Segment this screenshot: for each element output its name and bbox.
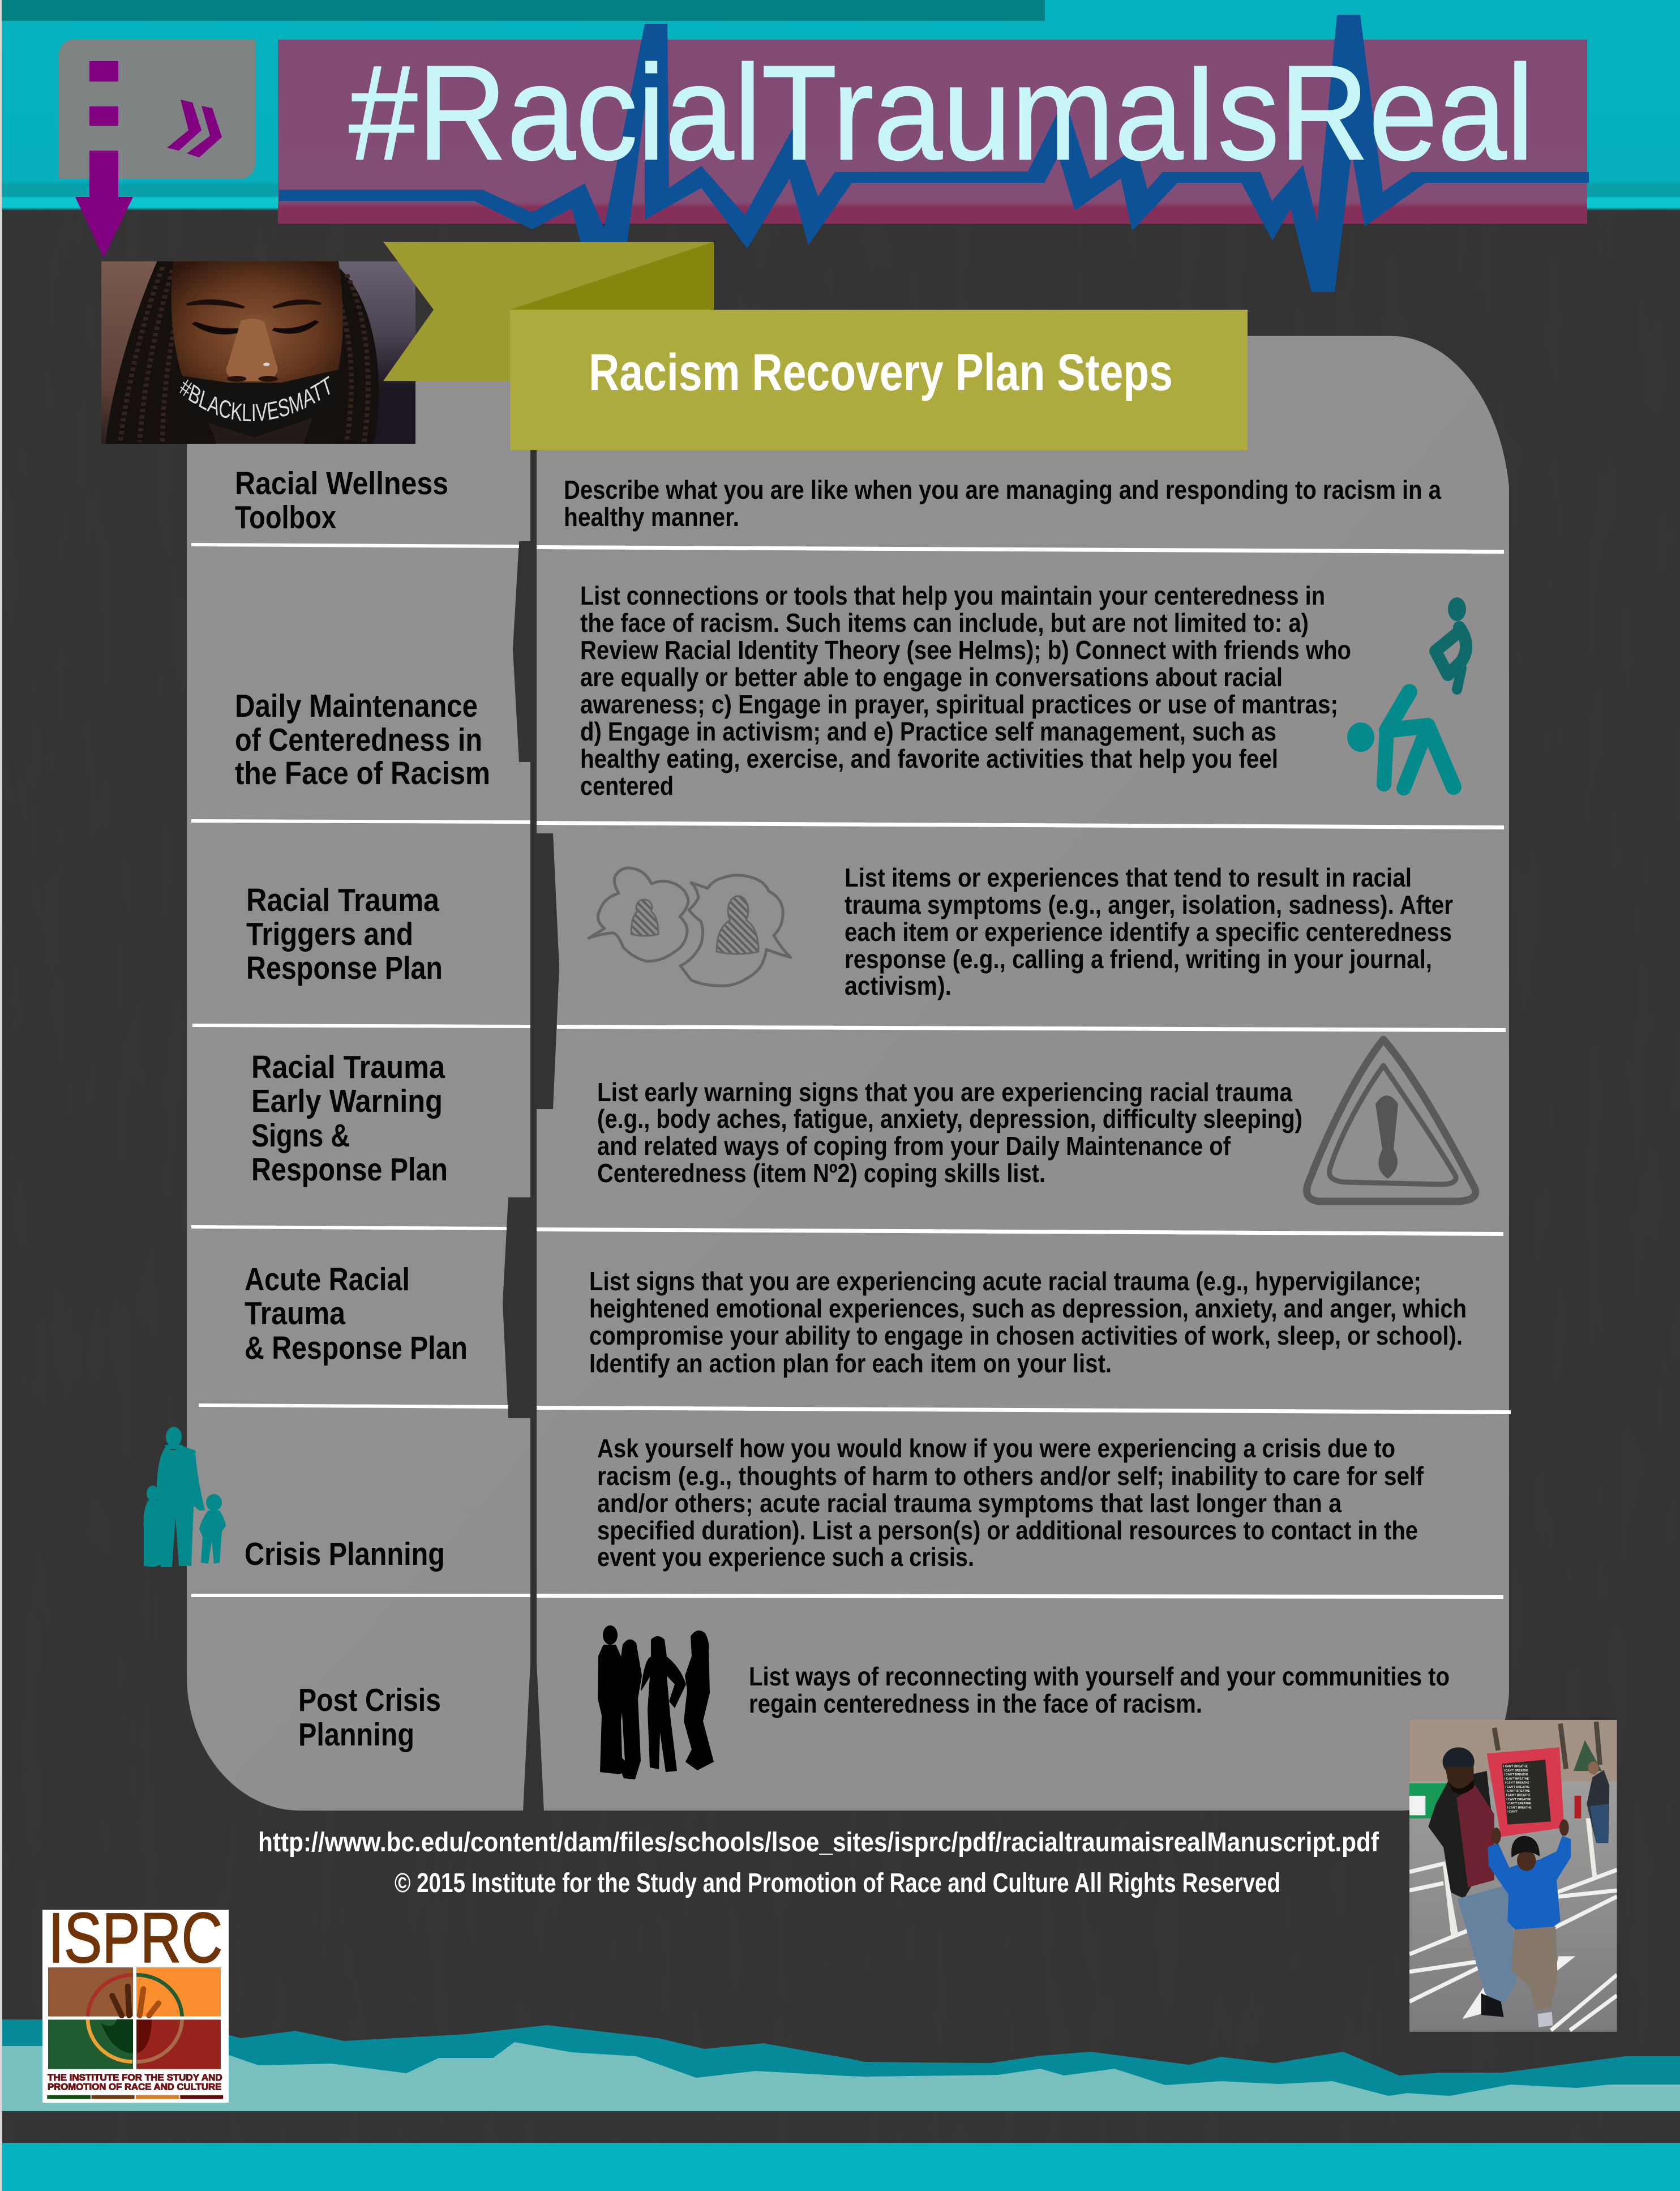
photo: man and boy with sign: I CAN'T BREATHE (1507, 1806, 1532, 1809)
photo: man and boy with sign: I CAN'T BREATHE (1504, 1769, 1528, 1773)
icon: warning triangle (1307, 1039, 1476, 1201)
left column headings: of Centeredness in (235, 722, 482, 758)
text: step 5 description: Identify an action plan for each item on your list. (589, 1349, 1112, 1378)
logo: ISPRC: PROMOTION OF RACE AND CULTURE (48, 2082, 221, 2092)
text: step 5 description: heightened emotional experiences, such as depression, anxiety, and anger, which (589, 1294, 1467, 1323)
arrow: purple down arrow (75, 151, 133, 258)
left column headings: Daily Maintenance (235, 688, 478, 724)
source link: http://www.bc.edu/content/dam/files/schools/lsoe_sites/isprc/pdf/racialtraumaisrealManuscript.pdf (258, 1828, 1379, 1858)
text: step 7 description: regain centeredness in the face of racism. (749, 1689, 1202, 1718)
logo: ISPRC: ISPRC (48, 1899, 222, 1978)
text: step 4 description (597, 1077, 1302, 1188)
text: step 2 description: d) Engage in activism; and e) Practice self management, such as (580, 717, 1276, 746)
tape text: #BLACKLIVESMATT (179, 376, 330, 421)
text: step 2 description: List connections or tools that help you maintain your centeredness in (580, 581, 1325, 610)
photo: woman with taped mouth (101, 262, 417, 444)
section banner: Racism Recovery Plan Steps (589, 344, 1173, 401)
photo: man and boy with sign: I CAN'T (1507, 1810, 1518, 1814)
left column headings: Signs & (251, 1118, 350, 1154)
text: step 2 description (580, 581, 1351, 801)
text: step 5 description (589, 1266, 1467, 1378)
logo: ISPRC (42, 1899, 229, 2103)
text: step 1 description: Describe what you are like when you are managing and responding to racism in a (564, 475, 1441, 504)
centre divider (503, 450, 559, 1815)
photo: man and boy with sign: I CAN'T BREATHE (1503, 1765, 1528, 1769)
photo: man and boy with sign: I CAN'T BREATHE (1507, 1802, 1531, 1805)
left column headings: the Face of Racism (235, 755, 490, 791)
photo: man and boy with sign: I CAN'T BREATHE (1505, 1786, 1530, 1789)
icon: group silhouette (598, 1625, 714, 1779)
left column headings: Racial Trauma (251, 1049, 445, 1085)
text: step 2 description: are equally or better able to engage in conversations about racial (580, 662, 1283, 692)
text: step 2 description: awareness; c) Engage in prayer, spiritual practices or use of mantras; (580, 690, 1338, 719)
left column headings: Crisis Planning (245, 1536, 445, 1572)
left column headings: Post Crisis (298, 1682, 441, 1718)
text: step 2 description: Review Racial Identity Theory (see Helms); b) Connect with friends who (580, 635, 1351, 665)
text: step 1 description: healthy manner. (564, 502, 739, 532)
copyright: © 2015 Institute for the Study and Promotion of Race and Culture All Rights Reserved (395, 1868, 1280, 1898)
left column headings (235, 465, 490, 1753)
icon: exercising figures (1347, 597, 1466, 788)
text: step 4 description: List early warning signs that you are experiencing racial trauma (597, 1077, 1292, 1107)
text: step 3 description: List items or experiences that tend to result in racial (845, 863, 1412, 892)
left column headings: Racial Trauma (246, 882, 440, 918)
text: step 2 description: centered (580, 771, 674, 801)
text: step 4 description: Centeredness (item Nº2) coping skills list. (597, 1158, 1045, 1188)
photo: man and boy with sign: I CAN'T BREATHE (1506, 1790, 1530, 1793)
logo: ISPRC: THE INSTITUTE FOR THE STUDY AND (48, 2072, 222, 2083)
text: step 7 description: List ways of reconnecting with yourself and your communities to (749, 1662, 1450, 1691)
text: step 7 description (749, 1662, 1450, 1718)
left column headings: & Response Plan (245, 1330, 468, 1366)
text: step 6 description: and/or others; acute racial trauma symptoms that last longer than a (597, 1488, 1342, 1518)
photo: man and boy with sign: I CAN'T BREATHE (1505, 1777, 1529, 1781)
heartbeat line (279, 15, 1589, 292)
left column headings: Toolbox (235, 499, 336, 536)
text: step 6 description: Ask yourself how you would know if you were experiencing a crisis due to (597, 1433, 1395, 1463)
photo: man and boy with sign: I CAN'T BREATHE (1506, 1798, 1531, 1801)
text: step 5 description: compromise your ability to engage in chosen activities of work, sleep, or school). (589, 1321, 1463, 1350)
text: step 2 description: healthy eating, exercise, and favorite activities that help you feel (580, 744, 1278, 773)
left column headings: Triggers and (246, 916, 413, 952)
section banner (510, 310, 1248, 450)
text: step 6 description: specified duration). List a person(s) or additional resources to contact in the (597, 1516, 1418, 1545)
left column headings: Early Warning (251, 1083, 443, 1119)
left column headings: Response Plan (246, 950, 443, 986)
left column headings: Acute Racial (245, 1261, 410, 1298)
title: #RacialTraumaIsReal (349, 38, 1534, 188)
text: step 6 description (597, 1433, 1424, 1572)
text: step 2 description: the face of racism. Such items can include, but are not limited to: a) (580, 608, 1309, 637)
text: step 4 description: (e.g., body aches, fatigue, anxiety, depression, difficulty sleeping) (597, 1104, 1302, 1133)
icon: family silhouette (144, 1427, 226, 1567)
title background panel (278, 40, 1587, 224)
mountain bands (2, 2019, 1680, 2111)
text: step 6 description: event you experience such a crisis. (597, 1542, 974, 1572)
text: step 3 description: each item or experience identify a specific centeredness (845, 917, 1452, 947)
photo: man and boy with sign: I CAN'T BREATHE (1506, 1794, 1531, 1798)
bottom teal band (2, 2143, 1680, 2191)
photo: man and boy with sign: I CAN'T BREATHE (1505, 1782, 1529, 1785)
left column headings: Planning (298, 1717, 414, 1753)
left column headings: Trauma (245, 1295, 346, 1332)
ribbon back (383, 242, 714, 381)
photo: man and boy with sign (1409, 1720, 1617, 2032)
photo: man and boy with sign: I CAN'T BREATHE (1504, 1773, 1529, 1777)
text: step 3 description: response (e.g., calling a friend, writing in your journal, (845, 944, 1432, 974)
text: step 3 description: activism). (845, 971, 952, 1000)
text: step 1 description (564, 475, 1441, 532)
top teal header band (2, 0, 1680, 211)
text: step 3 description (845, 863, 1453, 1000)
icon: thought bubbles (589, 868, 791, 986)
text: step 5 description: List signs that you are experiencing acute racial trauma (e.g., hypervigilance; (589, 1266, 1421, 1296)
text: step 4 description: and related ways of coping from your Daily Maintenance of (597, 1131, 1231, 1161)
text: step 3 description: trauma symptoms (e.g., anger, isolation, sadness). After (845, 890, 1453, 919)
text: step 6 description: racism (e.g., thoughts of harm to others and/or self; inability to care for self (597, 1461, 1424, 1491)
left column headings: Racial Wellness (235, 465, 448, 502)
left column headings: Response Plan (251, 1152, 448, 1188)
main grey panel (187, 336, 1509, 1811)
menu box icon (58, 39, 256, 258)
